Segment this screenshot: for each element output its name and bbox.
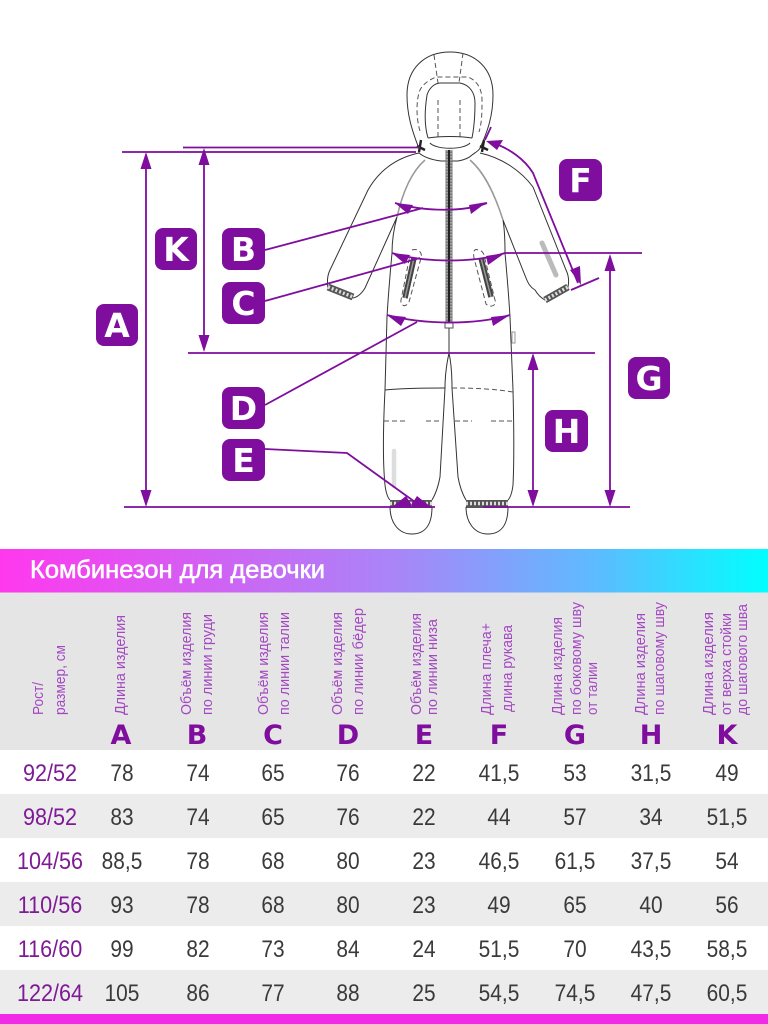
tag F: F [569, 161, 592, 200]
row 92/52: 53 [563, 760, 587, 786]
rotated column captions: Длина плеча+ [478, 623, 495, 715]
measure C [265, 253, 505, 301]
column letters: C [263, 720, 283, 751]
tag D [222, 387, 265, 429]
row 122/64: 60,5 [707, 980, 747, 1006]
row 98/52: 34 [639, 804, 663, 830]
row 122/64: 105 [105, 980, 139, 1006]
rotated column captions: Объём изделия [178, 612, 195, 715]
title band [0, 549, 768, 592]
measure K [183, 148, 595, 353]
rotated column captions: Длина изделия [549, 617, 566, 715]
rotated column captions: до шагового шва [734, 603, 751, 715]
row 122/64: 25 [412, 980, 436, 1006]
tag K [155, 228, 197, 270]
row 104/56: 46,5 [479, 848, 519, 874]
garment: hooded jumpsuit line drawing [327, 52, 569, 534]
tag A: A [104, 306, 130, 345]
side tab [512, 332, 515, 343]
raglan seams [397, 160, 503, 220]
centre zipper [445, 150, 453, 328]
row 98/52: 51,5 [707, 804, 747, 830]
row 92/52: 31,5 [631, 760, 671, 786]
column letters: E [415, 720, 433, 751]
measure G [483, 253, 642, 507]
row 98/52: 98/52 [23, 803, 77, 830]
row 110/56: 78 [186, 892, 210, 918]
row 122/64: 88 [336, 980, 360, 1006]
column letters: A [111, 720, 132, 751]
measure B [265, 202, 487, 250]
row 104/56 [0, 838, 768, 882]
tag H [545, 410, 588, 452]
row 122/64: 47,5 [631, 980, 671, 1006]
rotated column captions: от талии [584, 662, 601, 715]
row 92/52: 22 [412, 760, 436, 786]
leg cuffs [390, 500, 508, 508]
row 122/64: 122/64 [17, 979, 83, 1006]
rotated column captions: Длина изделия [632, 613, 649, 715]
reflective strips [394, 243, 556, 486]
row 122/64: 77 [261, 980, 285, 1006]
measure H [528, 353, 538, 507]
row 110/56: 40 [639, 892, 663, 918]
row 98/52: 76 [336, 804, 360, 830]
tag F [559, 159, 602, 201]
measure E [265, 449, 431, 507]
tag G [628, 357, 670, 399]
row 110/56 [0, 882, 768, 926]
title band: Комбинезон для девочки [30, 556, 325, 584]
row 110/56: 68 [261, 892, 285, 918]
row 92/52: 76 [336, 760, 360, 786]
row 98/52: 22 [412, 804, 436, 830]
measure D [265, 315, 510, 405]
row 122/64 [0, 970, 768, 1014]
row 104/56: 37,5 [631, 848, 671, 874]
row 116/60: 84 [336, 936, 360, 962]
tag B: B [231, 230, 256, 269]
row 116/60: 82 [186, 936, 210, 962]
size table [0, 592, 768, 1014]
row 104/56: 68 [261, 848, 285, 874]
column letters: F [490, 720, 508, 751]
rotated column captions: по линии талии [276, 612, 293, 715]
row 122/64: 74,5 [555, 980, 595, 1006]
row 116/60 [0, 926, 768, 970]
row 116/60: 116/60 [18, 935, 82, 962]
row 116/60: 51,5 [479, 936, 519, 962]
row 98/52: 65 [261, 804, 285, 830]
rotated column captions: по шаговому шву [651, 602, 668, 715]
hood [407, 52, 493, 161]
legs [432, 327, 466, 500]
rotated column captions: Длина изделия [700, 612, 717, 715]
row 92/52: 49 [715, 760, 739, 786]
row 116/60: 24 [412, 936, 436, 962]
row 116/60: 58,5 [707, 936, 747, 962]
row 92/52: 74 [186, 760, 210, 786]
row 122/64: 54,5 [479, 980, 519, 1006]
rotated column captions: размер, см [52, 645, 69, 715]
tag E [222, 439, 265, 481]
tag E: E [232, 441, 255, 480]
table header [0, 592, 768, 751]
row 122/64: 86 [186, 980, 210, 1006]
measure F [485, 127, 599, 290]
bottom magenta strip [0, 1014, 768, 1024]
tag A [96, 304, 138, 346]
rotated column captions: Длина изделия [112, 615, 129, 715]
column letters [111, 720, 739, 751]
row 92/52: 92/52 [23, 759, 77, 786]
rotated column captions: Объём изделия [408, 613, 425, 715]
tag G: G [635, 359, 663, 398]
row 110/56: 65 [563, 892, 587, 918]
column letters: B [187, 720, 207, 751]
row 110/56: 80 [336, 892, 360, 918]
tag C [222, 282, 265, 324]
pockets [401, 249, 495, 306]
sleeve cuffs [328, 287, 568, 300]
row 92/52: 65 [261, 760, 285, 786]
row 104/56: 54 [715, 848, 739, 874]
left sleeve and body side [327, 153, 419, 500]
row 116/60: 73 [261, 936, 285, 962]
row 92/52 [0, 750, 768, 794]
row 104/56: 104/56 [17, 847, 83, 874]
tag B [222, 228, 265, 270]
row 116/60: 43,5 [631, 936, 671, 962]
row 104/56: 23 [412, 848, 436, 874]
row 116/60: 70 [563, 936, 587, 962]
row 110/56: 56 [715, 892, 739, 918]
row 110/56: 23 [412, 892, 436, 918]
row 110/56: 49 [487, 892, 511, 918]
row 98/52: 57 [563, 804, 587, 830]
row 98/52: 83 [110, 804, 134, 830]
measurement lines and arrows [122, 127, 642, 507]
row 98/52: 44 [487, 804, 511, 830]
row 98/52: 74 [186, 804, 210, 830]
row 116/60: 99 [110, 936, 134, 962]
measure A [122, 152, 435, 507]
rotated column captions: по линии низа [424, 618, 441, 715]
tag C: C [231, 284, 256, 323]
feet [390, 507, 508, 534]
row 92/52: 41,5 [479, 760, 519, 786]
rotated column captions: Объём изделия [255, 612, 272, 715]
tag K: K [163, 230, 190, 269]
rotated column captions: длина рукава [499, 624, 516, 712]
column letters: H [640, 720, 662, 751]
column letters: D [337, 720, 359, 751]
row 92/52: 78 [110, 760, 134, 786]
rotated column captions: по линии бёдер [350, 608, 367, 715]
row 104/56: 88,5 [102, 848, 142, 874]
rotated column captions: от верха стойки [718, 613, 735, 715]
rotated column captions [30, 602, 751, 715]
row 110/56: 110/56 [18, 891, 82, 918]
row 104/56: 61,5 [555, 848, 595, 874]
row 104/56: 80 [336, 848, 360, 874]
row 110/56: 93 [110, 892, 134, 918]
rotated column captions: Рост/ [30, 681, 47, 715]
rotated column captions: по линии груди [199, 614, 216, 715]
tag H: H [553, 412, 580, 451]
column letters: K [717, 720, 739, 751]
rotated column captions: Объём изделия [329, 612, 346, 715]
column letters: G [564, 720, 586, 751]
rotated column captions: по боковому шву [568, 602, 585, 715]
tag D: D [230, 389, 257, 428]
row 98/52 [0, 794, 768, 838]
row 104/56: 78 [186, 848, 210, 874]
right sleeve and body side [480, 153, 569, 500]
